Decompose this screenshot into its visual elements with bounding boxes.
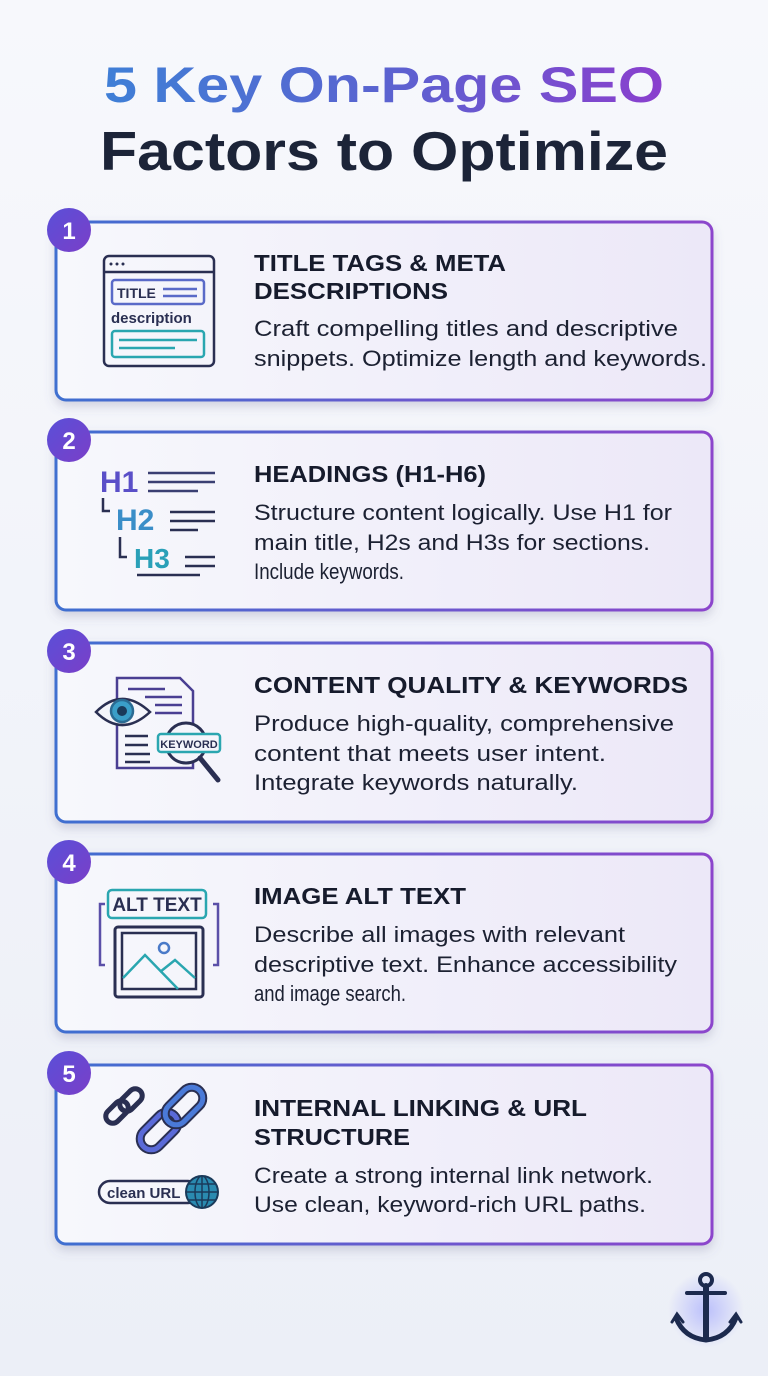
title: Factors to Optimize: [100, 120, 668, 182]
text: internal linking: INTERNAL LINKING & URL: [254, 1095, 587, 1121]
text: internal linking: Create a strong internal link network.: [254, 1163, 653, 1188]
panel: image alt text: [47, 840, 712, 1032]
icon: browser title: [104, 256, 214, 366]
text: alt text: Describe all images with relevant: [254, 922, 625, 947]
badge 1: 1: [62, 218, 76, 245]
icon: browser title: description: [111, 310, 192, 327]
badge 2: 2: [62, 428, 76, 455]
text: content quality: Integrate keywords naturally.: [254, 770, 578, 795]
icon: heading hierarchy: H2: [116, 504, 154, 537]
icon: alt text image: ALT TEXT: [112, 895, 202, 916]
text: content quality: [254, 672, 688, 795]
title: [100, 57, 668, 182]
text: alt text: descriptive text. Enhance accessibility: [254, 952, 677, 977]
icon: heading hierarchy: H1: [100, 466, 138, 499]
text: title tags: Craft compelling titles and descriptive: [254, 316, 678, 341]
icon: document eye keyword: KEYWORD: [160, 739, 218, 751]
text: headings: Structure content logically. Use H1 for: [254, 500, 672, 525]
text: alt text: and image search.: [254, 981, 406, 1006]
text: alt text: [254, 883, 677, 1006]
badge 1: [47, 208, 91, 252]
badge 4: [47, 840, 91, 884]
text: internal linking: STRUCTURE: [254, 1124, 410, 1150]
text: title tags: [254, 250, 707, 371]
text: alt text: IMAGE ALT TEXT: [254, 883, 466, 909]
text: headings: Include keywords.: [254, 559, 404, 584]
icon: anchor: [668, 1272, 744, 1348]
text: headings: HEADINGS (H1-H6): [254, 461, 486, 487]
icon: document eye keyword: [96, 678, 220, 780]
panel: headings: [47, 418, 712, 610]
icon: alt text image: [100, 890, 218, 997]
text: internal linking: [254, 1095, 653, 1217]
badge 2: [47, 418, 91, 462]
icon: browser title: TITLE: [117, 285, 156, 301]
text: internal linking: Use clean, keyword-rich URL paths.: [254, 1192, 646, 1217]
icon: chain links and clean URL: clean URL: [107, 1185, 180, 1202]
badge 5: [47, 1051, 91, 1095]
badge 5: 5: [62, 1061, 76, 1088]
panel: title tags: [47, 208, 712, 400]
text: content quality: content that meets user intent.: [254, 741, 606, 766]
text: headings: main title, H2s and H3s for sections.: [254, 530, 650, 555]
text: title tags: TITLE TAGS & META: [254, 250, 506, 276]
panel: internal linking: [47, 1051, 712, 1244]
badge 3: 3: [62, 639, 76, 666]
icon: heading hierarchy: H3: [134, 543, 170, 574]
icon: chain links and clean URL: [99, 1083, 218, 1208]
icon: heading hierarchy: [100, 466, 215, 575]
text: title tags: snippets. Optimize length and keywords.: [254, 346, 707, 371]
title: 5 Key On-Page SEO: [104, 57, 664, 113]
text: content quality: CONTENT QUALITY & KEYWORDS: [254, 672, 688, 698]
text: content quality: Produce high-quality, comprehensive: [254, 711, 674, 736]
badge 3: [47, 629, 91, 673]
text: headings: [254, 461, 672, 584]
panel: content quality: [47, 629, 712, 822]
badge 4: 4: [62, 850, 76, 877]
text: title tags: DESCRIPTIONS: [254, 278, 448, 304]
